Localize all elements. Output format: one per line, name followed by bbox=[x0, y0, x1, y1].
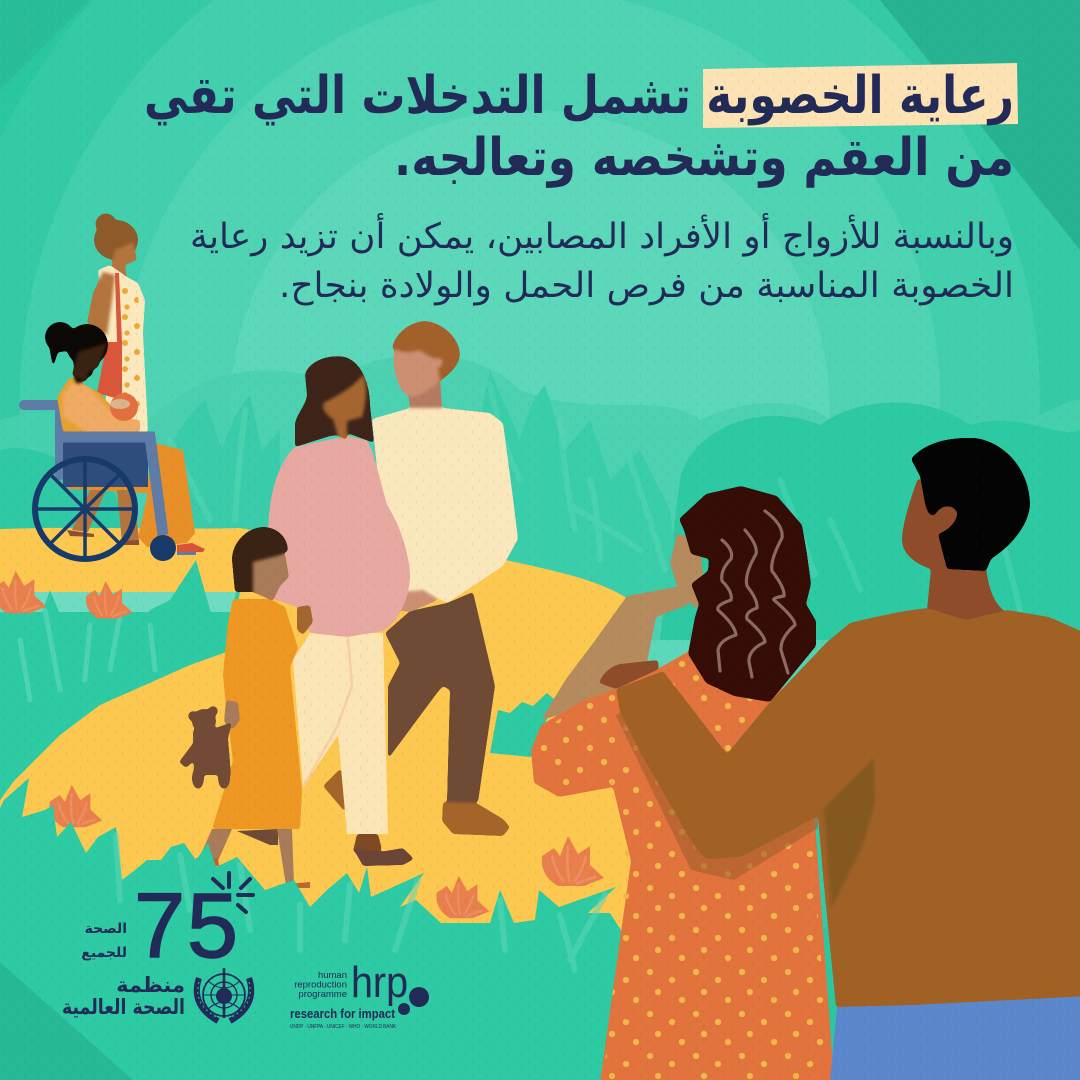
small wheel bbox=[150, 535, 176, 561]
logo: HRP: hrp bbox=[351, 958, 408, 1007]
figure: child with teddy bear bbox=[179, 527, 313, 888]
grass patch right of path bbox=[490, 693, 555, 757]
dotted dress bbox=[87, 265, 148, 432]
logo: WHO name bbox=[62, 973, 185, 1019]
raised arm bbox=[541, 586, 690, 720]
neck, face and ear bbox=[902, 478, 1007, 620]
curly hair bbox=[679, 486, 816, 702]
logo: WHO name: الصحة العالمية bbox=[62, 995, 185, 1019]
body, hair and face bbox=[45, 322, 140, 432]
logo: WHO 75: للجميع bbox=[81, 945, 127, 961]
logo: HRP: programme bbox=[298, 989, 347, 1000]
teddy arm and hand bbox=[224, 700, 240, 730]
orange skirt bbox=[68, 443, 195, 547]
figure: pregnant couple bbox=[268, 321, 518, 866]
background foliage bbox=[0, 355, 1080, 640]
pink sweater bbox=[268, 436, 410, 637]
wheelchair back and handle bbox=[24, 405, 60, 475]
baby bundle bbox=[110, 393, 138, 421]
logo: HRP: research for impact bbox=[290, 1006, 396, 1021]
logo: HRP: reproduction bbox=[294, 980, 347, 990]
icon: WHO emblem bbox=[197, 968, 251, 1021]
mid grass between path bands bbox=[0, 560, 240, 800]
title bbox=[144, 66, 1014, 188]
highlight behind title bbox=[703, 63, 1018, 128]
logo: WHO name: منظمة bbox=[116, 973, 185, 997]
figure: standing woman with bag bbox=[87, 214, 148, 432]
armrest and front bar bbox=[63, 437, 163, 535]
hair waves bbox=[718, 511, 795, 677]
footrest and shoe bbox=[177, 552, 196, 555]
woman cream trousers bbox=[293, 633, 388, 834]
flower: mid-left 2 bbox=[86, 581, 132, 618]
woman shoe bbox=[353, 834, 414, 866]
hand on mother bbox=[297, 605, 313, 635]
man upper body and head bbox=[372, 321, 518, 612]
brown sweater bbox=[616, 608, 1080, 1007]
figure: foreground man from behind bbox=[599, 438, 1080, 1080]
logo: HRP bbox=[290, 958, 429, 1030]
wheelchair seat bbox=[63, 442, 148, 487]
orange dotted dress bbox=[531, 650, 834, 1080]
blue jeans bbox=[830, 994, 1080, 1080]
child hair and face bbox=[232, 527, 289, 601]
logo: WHO 75 bbox=[81, 873, 253, 977]
logo: HRP: UNDP · UNFPA · UNICEF · WHO · WORLD BANK bbox=[290, 1024, 397, 1030]
sandals bbox=[196, 858, 310, 888]
flower: lower-left bbox=[49, 785, 102, 827]
legs bbox=[197, 829, 294, 885]
arm shadow bbox=[616, 712, 818, 880]
red bag bbox=[97, 273, 122, 400]
figure: woman in wheelchair bbox=[24, 322, 205, 561]
black hair bbox=[911, 438, 1030, 571]
body text: الخصوبة المناسبة من فرص الحمل والولادة بنجاح. bbox=[279, 266, 1014, 306]
foreground grass bbox=[0, 778, 640, 1080]
flower: bottom right bbox=[542, 836, 604, 886]
logo: WHO 75: 75 bbox=[134, 875, 238, 977]
logo: HRP: human bbox=[318, 970, 347, 981]
big wheel bbox=[35, 459, 135, 559]
hand on shoulder bbox=[599, 660, 659, 689]
back foot bbox=[237, 829, 278, 845]
face bbox=[670, 534, 705, 608]
flower: bottom centre bbox=[436, 876, 489, 918]
legs and shoes bbox=[72, 490, 139, 542]
body text: وبالنسبة للأزواج أو الأفراد المصابين، يمكن أن تزيد رعاية bbox=[190, 213, 1014, 257]
figure: foreground woman from behind bbox=[531, 486, 834, 1080]
teddy bear bbox=[179, 706, 232, 789]
logo: WHO 75: الصحة bbox=[85, 921, 127, 937]
man lower body bbox=[323, 592, 510, 836]
woman hair and face bbox=[295, 356, 374, 447]
yellow winding path bbox=[0, 528, 660, 1000]
hair and face bbox=[94, 214, 138, 280]
flower: mid-left 1 bbox=[0, 571, 46, 613]
orange dress bbox=[212, 599, 302, 829]
body text bbox=[190, 213, 1014, 306]
